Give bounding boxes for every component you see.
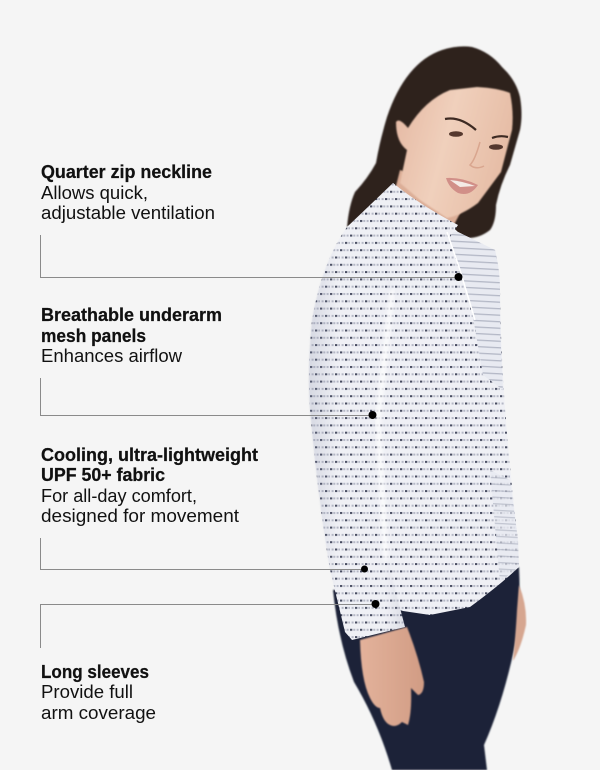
description: arm coverage [41, 703, 156, 723]
neck [395, 170, 470, 232]
heading: Cooling, ultra-lightweight [41, 445, 258, 465]
facial features [445, 118, 508, 194]
heading [41, 305, 222, 346]
description: Allows quick, [41, 183, 148, 203]
collar [370, 183, 458, 240]
leader line [40, 604, 375, 648]
pants [333, 567, 520, 770]
description [41, 682, 156, 723]
leader line [40, 538, 364, 570]
callout: cooling fabric [40, 445, 368, 572]
description: For all-day comfort, [41, 486, 197, 506]
description: Provide full [41, 682, 133, 702]
face [396, 87, 513, 218]
shirt lower side stripes [490, 470, 519, 582]
marker dot [372, 600, 380, 608]
heading [41, 445, 258, 485]
marker dot [454, 273, 462, 281]
leader line [40, 235, 458, 278]
leader line [40, 378, 372, 416]
heading: Breathable underarm [41, 305, 222, 325]
marker dot [361, 566, 368, 572]
marker dot [368, 411, 376, 419]
callout: quarter zip neckline [40, 162, 462, 281]
shirt body [330, 183, 519, 615]
description: Enhances airflow [41, 346, 183, 366]
description: adjustable ventilation [41, 203, 215, 223]
heading: mesh panels [41, 326, 146, 346]
description [41, 183, 215, 223]
photo: woman wearing quarter zip top [309, 46, 526, 770]
sleeve shading [309, 225, 405, 640]
sleeve [309, 225, 405, 640]
shirt upper side stripes [447, 232, 503, 390]
heading: UPF 50+ fabric [41, 465, 165, 485]
description: designed for movement [41, 506, 239, 526]
callout: long sleeves [40, 600, 380, 723]
hair [347, 46, 522, 238]
far hand [513, 585, 526, 661]
description [41, 486, 239, 526]
near hand [360, 627, 424, 726]
callout: breathable underarm mesh panels [40, 305, 376, 419]
heading: Quarter zip neckline [41, 162, 212, 182]
zipper [447, 232, 475, 320]
heading: Long sleeves [41, 662, 149, 682]
underarm fold [378, 290, 392, 560]
